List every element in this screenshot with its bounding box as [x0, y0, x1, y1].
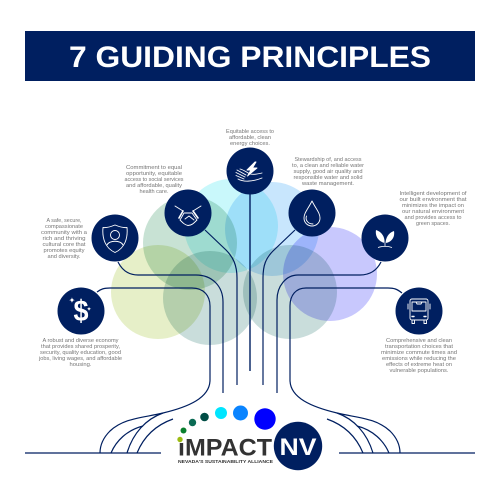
- icon: economy dollar: ✦: [69, 296, 76, 305]
- text: community: promotes equity: [44, 248, 85, 254]
- text: economy: jobs, living wages, and affordable: [38, 356, 122, 362]
- text: water and waste: supply, good air quality and: [294, 169, 362, 175]
- text: energy: Equitable access to: [226, 129, 274, 135]
- text: transportation: transportation choices that: [385, 344, 453, 350]
- text: built environment: Intelligent development of: [400, 191, 467, 197]
- text: transportation: vulnerable populations.: [390, 368, 449, 374]
- text: built environment: our built environment that: [400, 197, 467, 203]
- text: energy: [226, 129, 274, 147]
- text: economy: security, quality education, good: [40, 350, 121, 356]
- icon: plant sprout: [362, 214, 408, 262]
- icon: economy dollar: ✦: [86, 306, 92, 313]
- text: community: rich and thriving: [42, 236, 86, 242]
- text: built environment: our natural environment: [402, 209, 464, 215]
- text: water and waste: [292, 157, 364, 187]
- icon: handshake: [164, 190, 212, 236]
- logo: Impact NV: NEVADA'S SUSTAINABILITY ALLIANCE: [178, 459, 274, 465]
- text: water and waste: to, a clean and reliable water: [292, 163, 364, 169]
- text: social equity: health care.: [140, 189, 169, 195]
- text: community: [41, 218, 88, 260]
- text: social equity: opportunity, equitable: [126, 171, 182, 177]
- text: transportation: emissions while reducing the: [382, 356, 456, 362]
- text: built environment: [400, 191, 467, 227]
- title banner: [25, 31, 475, 81]
- text: social equity: Commitment to equal: [126, 165, 182, 171]
- icon: water drop: [288, 190, 336, 236]
- text: water and waste: responsible water and solid: [294, 175, 362, 181]
- text: built environment: and provides access to: [404, 215, 462, 221]
- text: social equity: access to social services: [124, 177, 184, 183]
- text: community: and diversity.: [48, 254, 81, 260]
- text: community: cultural core that: [42, 242, 86, 248]
- text: community: community with a: [41, 230, 88, 236]
- text: economy: A robust and diverse economy: [42, 338, 119, 344]
- text: social equity: and affordable, quality: [126, 183, 182, 189]
- logo: Impact NV: [177, 406, 322, 470]
- title banner: 7 GUIDING PRINCIPLES: [69, 41, 431, 74]
- text: built environment: green spaces.: [416, 221, 450, 227]
- text: transportation: [381, 338, 457, 374]
- text: community: A safe, secure,: [46, 218, 82, 224]
- text: built environment: minimizes the impact on: [402, 203, 464, 209]
- text: transportation: minimize commute times and: [381, 350, 457, 356]
- text: economy: that provides shared prosperity,: [41, 344, 120, 350]
- icon: economy dollar: [58, 288, 104, 334]
- text: economy: [38, 338, 122, 368]
- text: transportation: effects of extreme heat on: [386, 362, 452, 368]
- text: energy: energy choices.: [230, 141, 270, 147]
- logo: Impact NV: iMPACT: [178, 434, 272, 462]
- icon: energy hand and bolt: [226, 148, 274, 194]
- logo: Impact NV: NV: [280, 434, 316, 461]
- icon: community shield: [92, 214, 138, 262]
- text: water and waste: waste management.: [301, 181, 354, 187]
- text: transportation: Comprehensive and clean: [386, 338, 452, 344]
- text: social equity: [124, 165, 184, 195]
- icon: transit bus: [396, 288, 442, 334]
- overlapping tree canopy bubbles: [111, 179, 377, 345]
- text: community: compassionate: [45, 224, 83, 230]
- tree trunk and branch lines: [25, 194, 475, 453]
- text: economy: housing.: [70, 362, 92, 368]
- text: energy: affordable, clean: [229, 135, 271, 141]
- text: water and waste: Stewardship of, and access: [294, 157, 362, 163]
- icon: economy dollar: $: [74, 295, 89, 328]
